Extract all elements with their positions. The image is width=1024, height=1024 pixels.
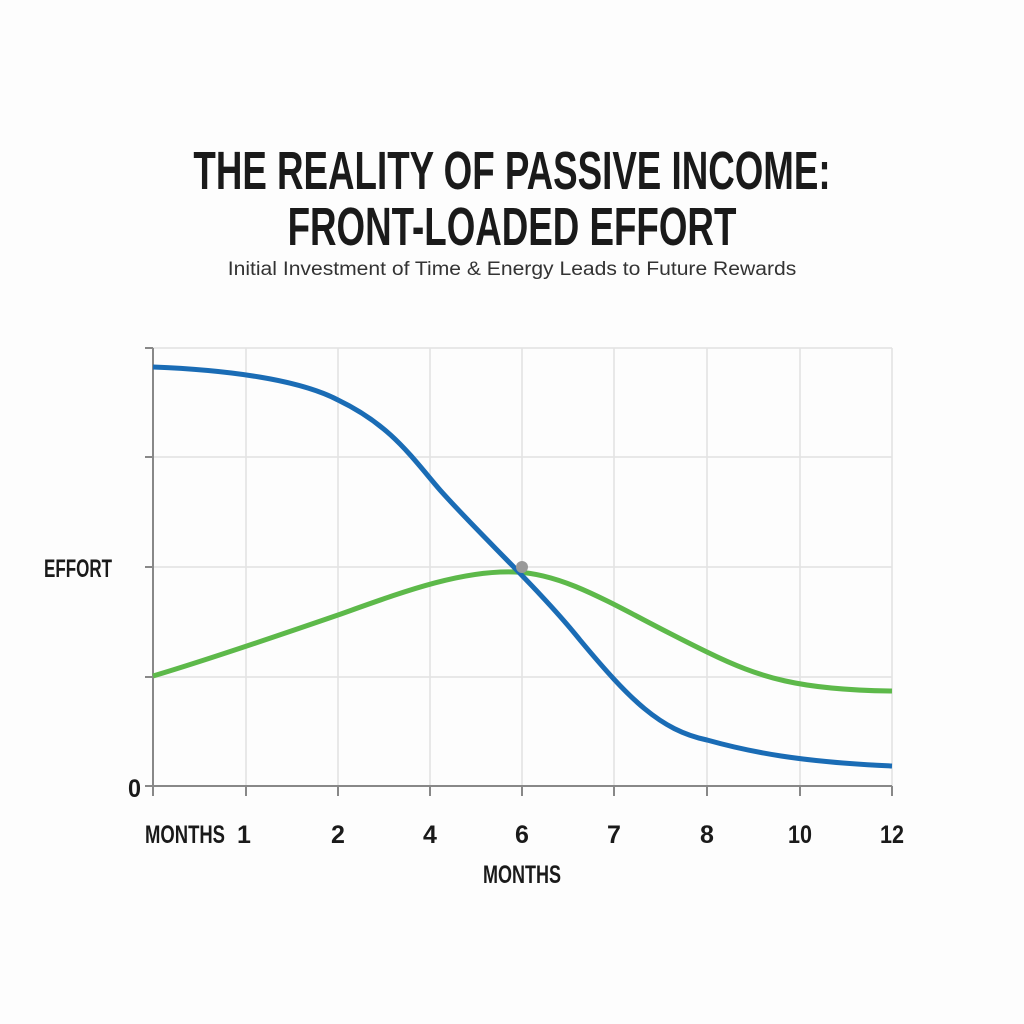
- title: THE REALITY OF PASSIVE INCOME:: [193, 141, 831, 201]
- labels: MONTHS: [145, 821, 225, 849]
- title: FRONT-LOADED EFFORT: [288, 197, 736, 257]
- title: [193, 141, 831, 257]
- labels: 4: [423, 821, 437, 849]
- labels: 1: [237, 821, 251, 849]
- labels: 12: [880, 821, 904, 849]
- subtitle: Initial Investment of Time & Energy Leads to Future Rewards: [228, 259, 796, 280]
- labels: 0: [128, 775, 141, 803]
- labels: 10: [788, 821, 812, 849]
- intersection dot: [516, 561, 528, 573]
- blue curve: [153, 367, 892, 766]
- axes: [145, 348, 892, 796]
- labels: 8: [700, 821, 714, 849]
- labels: 7: [607, 821, 621, 849]
- green curve: [153, 572, 892, 691]
- labels: 2: [331, 821, 345, 849]
- labels: MONTHS: [483, 861, 561, 889]
- labels: [44, 555, 904, 889]
- labels: EFFORT: [44, 555, 112, 583]
- labels: 6: [515, 821, 529, 849]
